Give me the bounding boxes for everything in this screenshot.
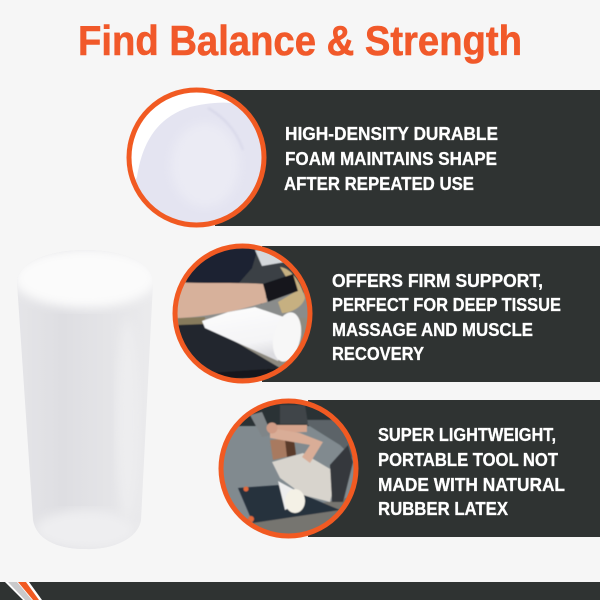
circular photo: leg on roller [170, 244, 315, 385]
text: foam description: FOAM MAINTAINS SHAPE [285, 149, 497, 169]
panel background [308, 400, 600, 537]
text: lightweight description: MADE WITH NATURAL [378, 475, 565, 495]
text: support description: RECOVERY [332, 344, 424, 364]
panel: lightweight [220, 400, 600, 540]
circular photo: foam texture [126, 88, 266, 228]
panel: firm support [170, 244, 600, 385]
foam roller product image [18, 290, 152, 549]
text: support description: MASSAGE AND MUSCLE [332, 320, 533, 340]
circular photo: man on roller [220, 400, 360, 540]
text: support description: PERFECT FOR DEEP TISSUE [332, 295, 561, 315]
title: Find Balance & Strength [78, 17, 522, 64]
text: foam description: HIGH-DENSITY DURABLE [285, 124, 498, 144]
text: foam description [284, 124, 498, 194]
panel background [215, 90, 600, 226]
text: lightweight description: PORTABLE TOOL NOT [378, 450, 558, 470]
text: support description [332, 271, 561, 364]
panel: high-density foam [120, 90, 600, 240]
text: lightweight description [378, 425, 565, 519]
footer bar with stripes [0, 582, 600, 600]
panel background [262, 246, 600, 382]
text: foam description: AFTER REPEATED USE [284, 174, 474, 194]
text: lightweight description: SUPER LIGHTWEIGHT, [378, 425, 556, 445]
text: lightweight description: RUBBER LATEX [378, 499, 508, 519]
text: support description: OFFERS FIRM SUPPORT, [332, 271, 543, 291]
